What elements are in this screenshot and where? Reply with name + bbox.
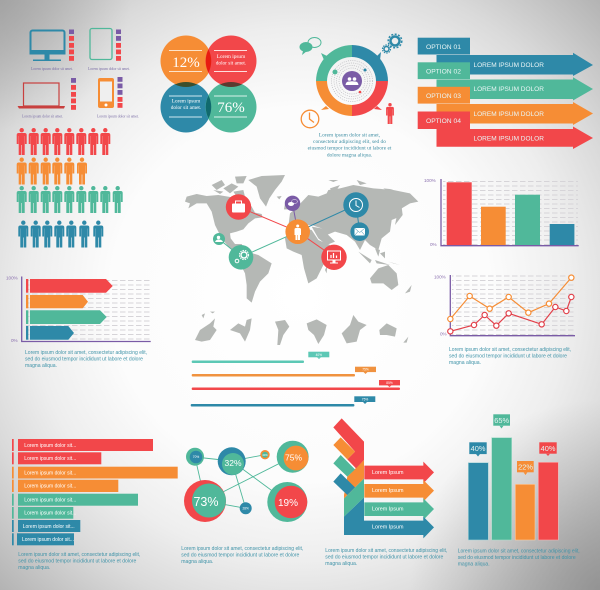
label: arrow orange: Lorem Ipsum bbox=[372, 488, 404, 494]
icon: tablet bbox=[90, 28, 121, 61]
text: description: Lorem ipsum dolor sit amet, consectetur adipiscing elit, bbox=[25, 350, 147, 356]
bubble: tiny percent: 40% bbox=[262, 453, 268, 457]
line: red series bbox=[448, 294, 574, 334]
caption: phone: Lorem ipsum dolor sit amet. bbox=[97, 114, 139, 118]
label: 100%: 100% bbox=[434, 274, 446, 280]
label: upper red circle text: Lorem ipsum bbox=[217, 54, 246, 60]
panel: bubble network bbox=[181, 441, 309, 565]
icon: mail node bbox=[350, 222, 369, 241]
bar row 6: Lorem ipsum dolor sit... bbox=[24, 511, 76, 517]
column: 65% green bbox=[492, 414, 512, 540]
text: description: magna aliqua. bbox=[181, 559, 213, 565]
progress: 75% blue bbox=[191, 396, 375, 406]
label: 0%: 0% bbox=[440, 332, 447, 336]
grid bbox=[26, 277, 151, 340]
text: ring description: dolore magna aliqua. bbox=[327, 152, 372, 158]
panel: people rows bbox=[17, 128, 123, 248]
bubble: 70%: 70% bbox=[193, 455, 199, 459]
arrow bar: blue bbox=[26, 326, 74, 340]
ribbon: option 04: OPTION 04 bbox=[426, 118, 461, 125]
progress: 75% orange bbox=[192, 367, 376, 376]
bar: blue bbox=[550, 224, 574, 245]
bar: green bbox=[515, 195, 540, 245]
panel: column chart bbox=[424, 178, 579, 247]
label: lower blue circle text: dolor sit amet. bbox=[171, 105, 201, 111]
hub: people icon bbox=[342, 71, 362, 91]
line: orange series bbox=[448, 275, 574, 322]
icon: speech bubbles bbox=[300, 38, 321, 55]
text: description: Lorem ipsum dolor sit amet, consectetur adipiscing elit, bbox=[181, 546, 303, 552]
progress: 40% bbox=[192, 352, 329, 363]
panel: option arrow ribbons bbox=[418, 38, 593, 149]
text: description: sed do eiusmod tempor incididunt ut labore et dolore bbox=[449, 354, 567, 360]
progress: 40%: 40% bbox=[316, 353, 322, 357]
label: 0%: 0% bbox=[11, 338, 18, 343]
arrow bar: red bbox=[26, 279, 113, 293]
caption: monitor: Lorem ipsum dolor sit amet. bbox=[31, 66, 73, 71]
icon: phone bbox=[98, 77, 122, 108]
text: ring description: consectetur adipiscing elit, sed do bbox=[313, 139, 386, 145]
text: description: Lorem ipsum dolor sit amet, consectetur adipiscing elit, bbox=[449, 347, 571, 353]
column: 40% red: 40% bbox=[541, 444, 556, 453]
bar row 4: Lorem ipsum dolor sit... bbox=[24, 484, 76, 490]
panel: folded arrows bbox=[325, 418, 447, 567]
axes bbox=[22, 276, 151, 342]
label: 12%: 12% bbox=[172, 55, 200, 71]
label: arrow red: Lorem Ipsum bbox=[372, 470, 404, 476]
icon: briefcase node bbox=[226, 194, 251, 220]
caption: tablet: Lorem ipsum dolor sit amet. bbox=[88, 66, 130, 71]
axes bbox=[450, 275, 575, 336]
icon: monitor bbox=[30, 30, 74, 61]
ribbon: option 04: LOREM IPSUM DOLOR bbox=[474, 136, 544, 142]
connector lines bbox=[219, 205, 360, 257]
text: description: magna aliqua. bbox=[458, 562, 490, 568]
panel: line chart bbox=[434, 274, 575, 366]
panel: world map bbox=[185, 175, 418, 345]
ribbon: option 01: OPTION 01 bbox=[426, 44, 461, 51]
ribbon: option 04 bbox=[418, 112, 593, 149]
icon: monitor chart node bbox=[321, 245, 347, 270]
icon: user node bbox=[213, 233, 225, 245]
panel: device icons bbox=[18, 28, 139, 118]
bar row 6 bbox=[12, 507, 76, 519]
label: 100%: 100% bbox=[424, 178, 436, 183]
progress: 75% orange: 75% bbox=[362, 368, 369, 372]
ribbon: option 02: LOREM IPSUM DOLOR bbox=[474, 86, 544, 93]
text: description: sed do eiusmod tempor incididunt ut labore et dolore bbox=[18, 558, 136, 564]
pictogram: green people bbox=[17, 186, 123, 213]
ribbon: option 02: OPTION 02 bbox=[426, 68, 461, 76]
panel: arrow bar chart bbox=[6, 276, 151, 369]
text: description: Lorem ipsum dolor sit amet, consectetur adipiscing elit, bbox=[18, 552, 140, 558]
bar row 7: Lorem ipsum dolor sit... bbox=[23, 524, 75, 530]
bar row 2 bbox=[12, 452, 101, 464]
bar row 2: Lorem ipsum dolor sit... bbox=[24, 456, 76, 462]
bubble: 28%: 28% bbox=[243, 506, 249, 510]
icon: laptop bbox=[18, 78, 76, 110]
bar row 8: Lorem ipsum dolor sit... bbox=[22, 537, 74, 543]
column: 40% blue: 40% bbox=[471, 444, 486, 453]
text: description: sed do eiusmod tempor incididunt ut labore et dolore bbox=[25, 356, 143, 362]
ribbon: option 03: LOREM IPSUM DOLOR bbox=[474, 111, 544, 118]
label: arrow green: Lorem Ipsum bbox=[372, 506, 404, 512]
label: lower blue circle text: Lorem ipsum bbox=[172, 98, 201, 104]
text: description: sed do eiusmod tempor incididunt ut labore et dolore bbox=[325, 554, 443, 560]
bubble: 73%: 73% bbox=[193, 495, 219, 509]
panel: overlapping percent circles bbox=[160, 36, 256, 132]
progress: 85%: 85% bbox=[386, 381, 393, 385]
icon: clock node bbox=[343, 192, 369, 218]
caption: laptop: Lorem ipsum dolor sit amet. bbox=[22, 114, 63, 118]
label: arrow blue: Lorem Ipsum bbox=[372, 524, 404, 530]
progress: 75% blue: 75% bbox=[362, 397, 368, 401]
panel: horizontal label bars bbox=[12, 439, 178, 571]
icon: gears bbox=[382, 34, 402, 53]
text: description: magna aliqua. bbox=[325, 561, 357, 567]
ribbon: option 03: OPTION 03 bbox=[426, 93, 461, 100]
bubble: 19%: 19% bbox=[278, 498, 298, 509]
text: ring description: Lorem ipsum dolor sit amet, bbox=[319, 132, 381, 138]
label: 76%: 76% bbox=[217, 100, 245, 116]
text: description: Lorem ipsum dolor sit amet, consectetur adipiscing elit, bbox=[458, 548, 580, 554]
text: description: sed do eiusmod tempor incididunt ut labore et dolore bbox=[181, 552, 299, 558]
icon: clock bbox=[301, 110, 319, 128]
text: description: magna aliqua. bbox=[25, 363, 57, 369]
panel: percent column chart bbox=[458, 414, 580, 568]
pictogram: blue people bbox=[18, 220, 103, 248]
bar row 5 bbox=[12, 494, 138, 506]
folded ribbon: shapes bbox=[333, 418, 434, 538]
grid bbox=[452, 275, 575, 335]
bubble: 75%: 75% bbox=[285, 452, 302, 462]
bubble: 32%: 32% bbox=[224, 458, 242, 468]
ribbon: option 02 bbox=[418, 62, 593, 100]
map: continents bbox=[185, 175, 418, 345]
ring: four quadrants bbox=[316, 45, 388, 116]
label: 0%: 0% bbox=[430, 242, 437, 247]
bar: orange bbox=[481, 207, 506, 245]
bar row 7 bbox=[12, 520, 80, 532]
text: description: magna aliqua. bbox=[18, 565, 50, 571]
ribbon: option 01: LOREM IPSUM DOLOR bbox=[474, 62, 544, 69]
pictogram: red people bbox=[17, 128, 110, 155]
bar row 3 bbox=[12, 467, 178, 478]
icon: person bbox=[386, 103, 394, 124]
bar row 4 bbox=[12, 480, 118, 492]
column: 40% red bbox=[538, 442, 558, 540]
column: 65% green: 65% bbox=[494, 416, 510, 425]
arrow bar: orange bbox=[26, 295, 88, 308]
icon: chat node bbox=[285, 196, 300, 211]
progress: 85% bbox=[192, 380, 400, 390]
icon: gears node bbox=[229, 245, 253, 270]
column: 40% blue bbox=[468, 442, 488, 540]
ribbon: option 01 bbox=[418, 38, 593, 76]
panel: circular ring diagram bbox=[300, 34, 402, 158]
arrow bar: green bbox=[26, 310, 107, 324]
text: description: magna aliqua. bbox=[449, 360, 481, 366]
grid bbox=[443, 178, 578, 245]
text: description: Lorem ipsum dolor sit amet, consectetur adipiscing elit, bbox=[325, 548, 447, 554]
axes bbox=[441, 179, 579, 246]
pictogram: orange people bbox=[17, 158, 87, 184]
icon: person hub node bbox=[285, 219, 310, 244]
column: 22% orange: 22% bbox=[518, 462, 533, 472]
bar row 1 bbox=[12, 439, 153, 451]
panel: progress bars bbox=[191, 352, 400, 406]
connector lines bbox=[195, 455, 293, 508]
bar row 1: Lorem ipsum dolor sit... bbox=[24, 443, 76, 449]
text: description: sed do eiusmod tempor incididunt ut labore et dolore bbox=[458, 555, 576, 561]
text: ring description: eiusmod tempor incididunt ut labore et bbox=[308, 146, 392, 152]
label: 100%: 100% bbox=[6, 276, 18, 280]
label: upper red circle text: dolor sit amet. bbox=[216, 60, 246, 66]
bar row 3: Lorem ipsum dolor sit... bbox=[24, 470, 76, 476]
ribbon: option 03 bbox=[418, 87, 593, 125]
column: 22% orange bbox=[515, 461, 535, 540]
bar: red bbox=[447, 182, 472, 245]
ring: dotted inner circles bbox=[332, 60, 372, 102]
bar row 8 bbox=[12, 533, 74, 545]
bar row 5: Lorem ipsum dolor sit... bbox=[24, 497, 76, 503]
